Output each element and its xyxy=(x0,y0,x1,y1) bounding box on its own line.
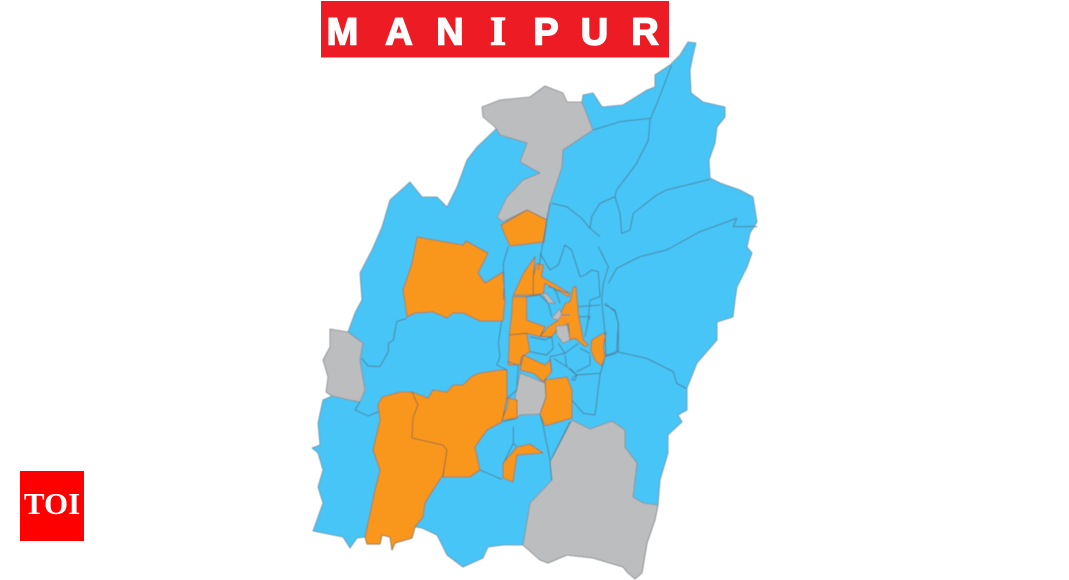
grey central constituencies xyxy=(542,293,570,343)
grey region: north xyxy=(482,86,593,222)
title banner: MANIPUR: U xyxy=(581,12,608,54)
orange region: south-west centre xyxy=(412,370,507,477)
orange region: north xyxy=(501,210,547,246)
title banner: MANIPUR xyxy=(321,1,669,58)
map of Manipur constituencies xyxy=(312,42,757,579)
grey region: west xyxy=(323,329,365,402)
grey region: centre south xyxy=(515,373,546,418)
north-east boundaries xyxy=(503,65,757,300)
title banner: MANIPUR: A xyxy=(385,12,413,54)
orange region: south centre xyxy=(540,377,572,426)
TOI logo xyxy=(20,471,84,541)
orange region: arch xyxy=(503,444,543,482)
title banner: MANIPUR: R xyxy=(631,12,659,54)
southern boundaries xyxy=(355,305,686,480)
title banner: MANIPUR: I xyxy=(490,8,506,54)
orange region: west large xyxy=(403,237,505,321)
title banner: MANIPUR: P xyxy=(533,12,559,54)
TOI logo: TOI xyxy=(24,486,80,521)
title banner: MANIPUR: M xyxy=(327,12,358,54)
blue constituencies: state outline xyxy=(312,42,757,579)
central boundaries xyxy=(527,245,618,378)
grey region: south-east xyxy=(523,420,658,579)
orange region: south-west long xyxy=(365,392,447,550)
central valley cluster xyxy=(508,245,618,382)
orange central constituencies xyxy=(508,257,606,382)
title banner: MANIPUR: N xyxy=(436,12,464,54)
orange region: small beside grey xyxy=(502,398,517,420)
